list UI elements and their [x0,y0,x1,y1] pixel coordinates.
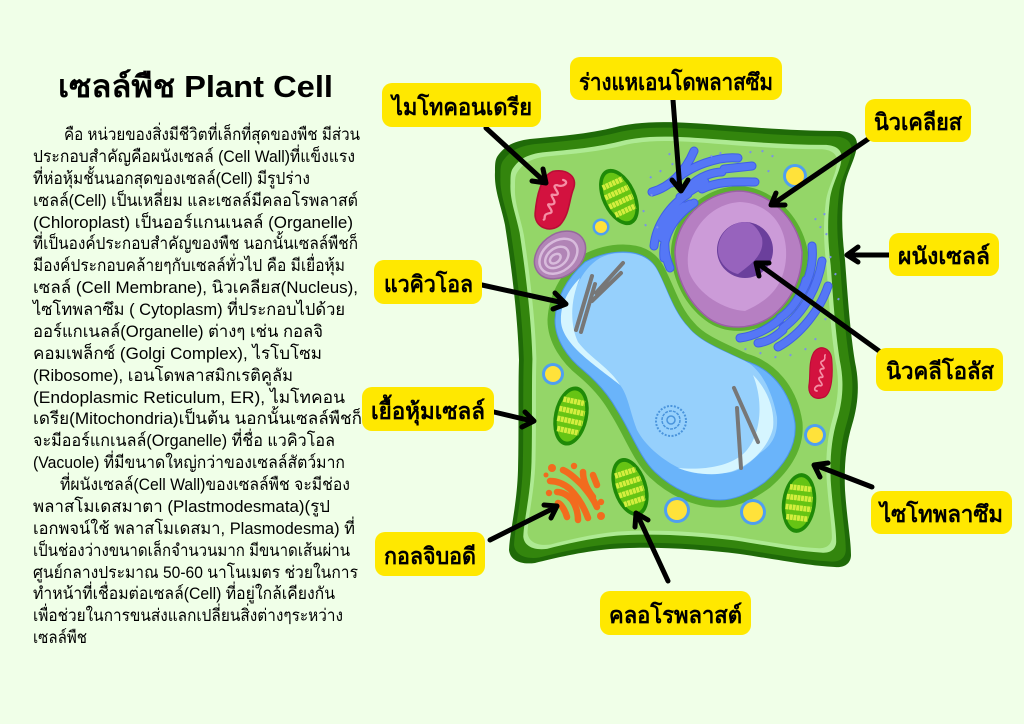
label: cytoplasm [871,491,1012,534]
golgi body [544,463,605,520]
text block: description: เพื่อช่วยในการขนส่งแลกเปลี่ยนสิ่งต่างๆระหว่าง [33,603,343,625]
arrow: cytoplasm [814,463,872,487]
label: nucleolus [876,348,1003,391]
label: endoplasmic reticulum: ร่างแหเอนโดพลาสซึม [579,68,773,95]
text block: description: (Endoplasmic Reticulum, ER), ไมโทคอน [33,387,345,407]
text block: description: เป็นช่องว่างขนาดเล็กจำนวนมาก มีขนาดเส้นผ่าน [33,539,350,560]
label: cell wall [889,233,999,276]
text block: description: เอกพจน์ใช้ พลาสโมเดสมา, Plasmodesma) ที่ [33,516,355,538]
mitochondria [533,168,833,399]
label: vacuole: แวคิวโอล [384,270,473,297]
text block: description: ประกอบสำคัญคือผนังเซลล์ (Cell Wall)ที่แข็งแรง [33,144,355,166]
title: เซลล์พืช Plant Cell [58,69,333,104]
cell wall [495,122,858,567]
arrow: cell membrane [494,412,534,427]
crystals in vacuole [576,263,758,468]
arrow: golgi [490,505,557,540]
text block: description: ออร์แกเนลล์(Organelle) ต่างๆ เช่น กอลจิ [33,322,323,341]
label: vacuole [374,260,482,304]
label: cytoplasm: ไซโทพลาซึม [877,500,1003,527]
plant cell diagram [495,122,858,567]
text block: description: ที่ผนังเซลล์(Cell Wall)ของเซลล์พืช จะมีช่อง [60,472,350,494]
text block: description: เซลล์(Cell) เป็นเหลี่ยม และเซลล์มีคลอโรพลาสต์ [33,188,358,210]
chloroplasts [548,163,820,535]
text block: description: ไซโทพลาซึม ( Cytoplasm) ที่ประกอบไปด้วย [31,297,345,319]
vesicles [542,164,826,525]
label: chloroplast [600,591,751,635]
label: nucleolus: นิวคลีโอลัส [886,357,995,384]
arrow: vacuole [482,285,566,309]
label: cell membrane [362,387,494,431]
label: nucleus [865,99,971,142]
arrow: chloroplast [635,513,668,581]
ribosome swirl [656,406,686,436]
vacuole [555,252,795,500]
text block: description [31,122,362,647]
text block: description: ทำหน้าที่เชื่อมต่อเซลล์(Cell) ที่อยู่ใกล้เคียงกัน [33,581,335,604]
text block: description: ที่ห่อหุ้มชั้นนอกสุดของเซลล์(Cell) มีรูปร่าง [33,166,310,189]
text block: description: ศูนย์กลางประมาณ 50-60 นาโนเมตร ช่วยในการ [33,562,358,583]
text block: description: พลาสโมเดสมาตา (Plastmodesmata)(รูป [33,496,330,517]
text block: description: คือ หน่วยของสิ่งมีชีวิตที่เล็กที่สุดของพืช มีส่วน [64,122,360,145]
text block: description: มีองค์ประกอบคล้ายๆกับเซลล์ทั่วไป คือ มีเยื่อหุ้ม [33,253,345,276]
text block: description: ที่เป็นองค์ประกอบสำคัญของพืช นอกนั้นเซลล์พืชก็ [33,231,358,253]
label: cell wall: ผนังเซลล์ [898,243,990,269]
text block: description: (Vacuole) ที่มีขนาดใหญ่กว่าของเซลล์สัตว์มาก [33,450,345,472]
endoplasmic reticulum [643,150,839,358]
purple organelle [525,221,595,289]
cytoplasm [515,141,838,548]
nucleus [671,186,808,331]
text block: description: เซลล์ (Cell Membrane), นิวเคลียส(Nucleus), [33,278,358,297]
label: golgi body: กอลจิบอดี [384,543,476,569]
nucleolus [717,222,773,278]
text block: description: (Ribosome), เอนโดพลาสมิกเรติคูลัม [33,365,293,386]
text block: description: คอมเพล็กซ์ (Golgi Complex), ไรโบโซม [33,342,322,363]
text block: description: (Chloroplast) เป็นออร์แกนเนลล์ (Organelle) [33,211,353,232]
arrow: cell wall [847,247,889,262]
arrow: nucleus [771,135,874,205]
text block: description: เซลล์พืช [33,628,87,647]
label: cell membrane: เยื้อหุ้มเซลล์ [371,394,485,426]
text block: description: จะมีออร์แกเนลล์(Organelle) ที่ชื่อ แวคิวโอล [33,428,335,450]
label: chloroplast: คลอโรพลาสต์ [609,601,742,628]
label: nucleus: นิวเคลียส [874,109,963,135]
label: golgi body [375,532,485,576]
arrow: nucleolus [756,263,886,356]
arrow: mitochondria [486,128,546,183]
text block: description: เดรีย(Mitochondria)เป็นต้น นอกนั้นเซลล์พืชก็ [33,406,362,428]
arrow: endoplasmic reticulum [672,100,688,191]
label: mitochondria [382,83,541,127]
label: endoplasmic reticulum [570,57,782,100]
label: mitochondria: ไมโทคอนเดรีย [389,93,532,120]
